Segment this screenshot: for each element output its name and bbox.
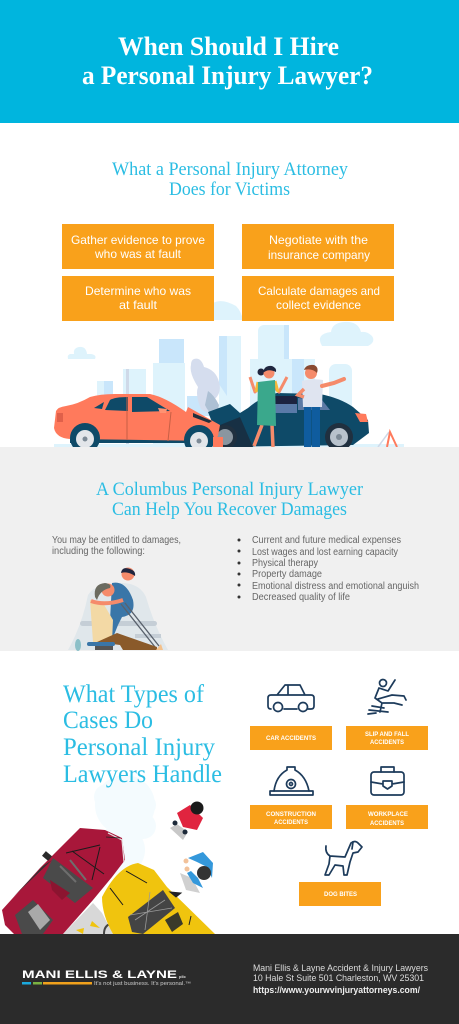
header banner bbox=[0, 0, 459, 123]
illustration: orange car bbox=[54, 394, 223, 455]
category: slip and fall: ACCIDENTS bbox=[370, 739, 405, 746]
panel: types of cases bbox=[2, 680, 428, 934]
logo: It's not just business. It's personal.™ bbox=[94, 981, 191, 987]
section heading: What a Personal Injury Attorney bbox=[112, 159, 348, 180]
contact details: 10 Hale St Suite 501 Charleston, WV 25301 bbox=[253, 973, 424, 984]
category: slip and fall: SLIP AND FALL bbox=[365, 731, 409, 738]
damages list: Physical therapy bbox=[252, 558, 318, 569]
section heading: Cases Do bbox=[63, 707, 153, 734]
icon: briefcase bbox=[371, 767, 404, 795]
illustration: man bbox=[298, 365, 344, 447]
action box: gather evidence: Gather evidence to prove bbox=[71, 233, 205, 247]
action box: calculate damages: Calculate damages and bbox=[258, 284, 380, 298]
category: car accidents bbox=[250, 726, 332, 750]
section heading bbox=[112, 159, 348, 200]
icon: car bbox=[268, 685, 314, 712]
category: construction bbox=[250, 805, 332, 829]
damages list: Property damage bbox=[252, 569, 322, 580]
action box: negotiate bbox=[242, 224, 394, 269]
action box: gather evidence bbox=[62, 224, 214, 269]
category: car accidents: CAR ACCIDENTS bbox=[266, 735, 317, 742]
illustration: ground debris bbox=[63, 903, 113, 934]
section heading: What Types of bbox=[63, 681, 205, 708]
logo: pllc bbox=[179, 974, 187, 979]
contact details bbox=[253, 963, 428, 996]
action box: calculate damages: collect evidence bbox=[276, 298, 361, 312]
damages list: Decreased quality of life bbox=[252, 592, 350, 603]
category: workplace: ACCIDENTS bbox=[370, 820, 405, 827]
panel: what an attorney does bbox=[54, 159, 404, 455]
illustration: yellow car crash bbox=[102, 863, 215, 934]
illustration: person in red bbox=[170, 802, 204, 840]
illustration: city skyline bbox=[54, 301, 404, 448]
action box: determine fault: at fault bbox=[119, 298, 158, 312]
title bbox=[82, 32, 373, 90]
section heading bbox=[63, 681, 222, 788]
contact details: https://www.yourwvinjuryattorneys.com/ bbox=[253, 985, 420, 996]
section heading: Can Help You Recover Damages bbox=[112, 499, 347, 520]
action box: negotiate: insurance company bbox=[268, 248, 370, 262]
category: slip and fall bbox=[346, 726, 428, 750]
section heading bbox=[96, 479, 364, 520]
footer bbox=[0, 934, 459, 1024]
section heading: Personal Injury bbox=[63, 734, 215, 761]
section heading: Does for Victims bbox=[169, 179, 290, 200]
illustration: woman bbox=[250, 366, 287, 447]
damages list: Current and future medical expenses bbox=[252, 535, 401, 546]
logo: MANI ELLIS & LAYNE bbox=[22, 969, 177, 981]
illustration: person in blue bbox=[180, 852, 213, 893]
category: workplace: WORKPLACE bbox=[368, 811, 409, 818]
intro text bbox=[52, 535, 181, 557]
illustration: warning triangle bbox=[378, 432, 397, 447]
damages list: Emotional distress and emotional anguish bbox=[252, 581, 419, 592]
illustration: red car crash bbox=[2, 828, 125, 934]
icon: dog bbox=[325, 842, 362, 875]
icon: slip and fall bbox=[368, 680, 406, 714]
section heading: Lawyers Handle bbox=[63, 761, 222, 788]
icon: construction helmet bbox=[270, 767, 313, 795]
action box: determine fault bbox=[62, 276, 214, 321]
category: dog bites: DOG BITES bbox=[324, 891, 358, 898]
damages list: Lost wages and lost earning capacity bbox=[252, 547, 398, 558]
title: When Should I Hire bbox=[118, 32, 339, 61]
intro text: You may be entitled to damages, bbox=[52, 535, 181, 546]
intro text: including the following: bbox=[52, 546, 145, 557]
title: a Personal Injury Lawyer? bbox=[82, 61, 373, 90]
illustration: dark car bbox=[208, 393, 369, 451]
category: workplace bbox=[346, 805, 428, 829]
action box: negotiate: Negotiate with the bbox=[269, 233, 368, 247]
damages list bbox=[238, 535, 419, 603]
category: dog bites bbox=[299, 882, 381, 906]
category: construction: ACCIDENTS bbox=[274, 819, 309, 826]
category: construction: CONSTRUCTION bbox=[266, 811, 316, 818]
action box: determine fault: Determine who was bbox=[85, 284, 191, 298]
section heading: A Columbus Personal Injury Lawyer bbox=[96, 479, 364, 500]
illustration: physical therapy bbox=[68, 568, 168, 651]
logo bbox=[22, 969, 191, 987]
panel: recover damages bbox=[0, 447, 459, 651]
contact details: Mani Ellis & Layne Accident & Injury Lawyers bbox=[253, 963, 428, 974]
action box: gather evidence: who was at fault bbox=[94, 247, 182, 261]
action box: calculate damages bbox=[242, 276, 394, 321]
illustration: smoke cloud bbox=[94, 775, 156, 875]
